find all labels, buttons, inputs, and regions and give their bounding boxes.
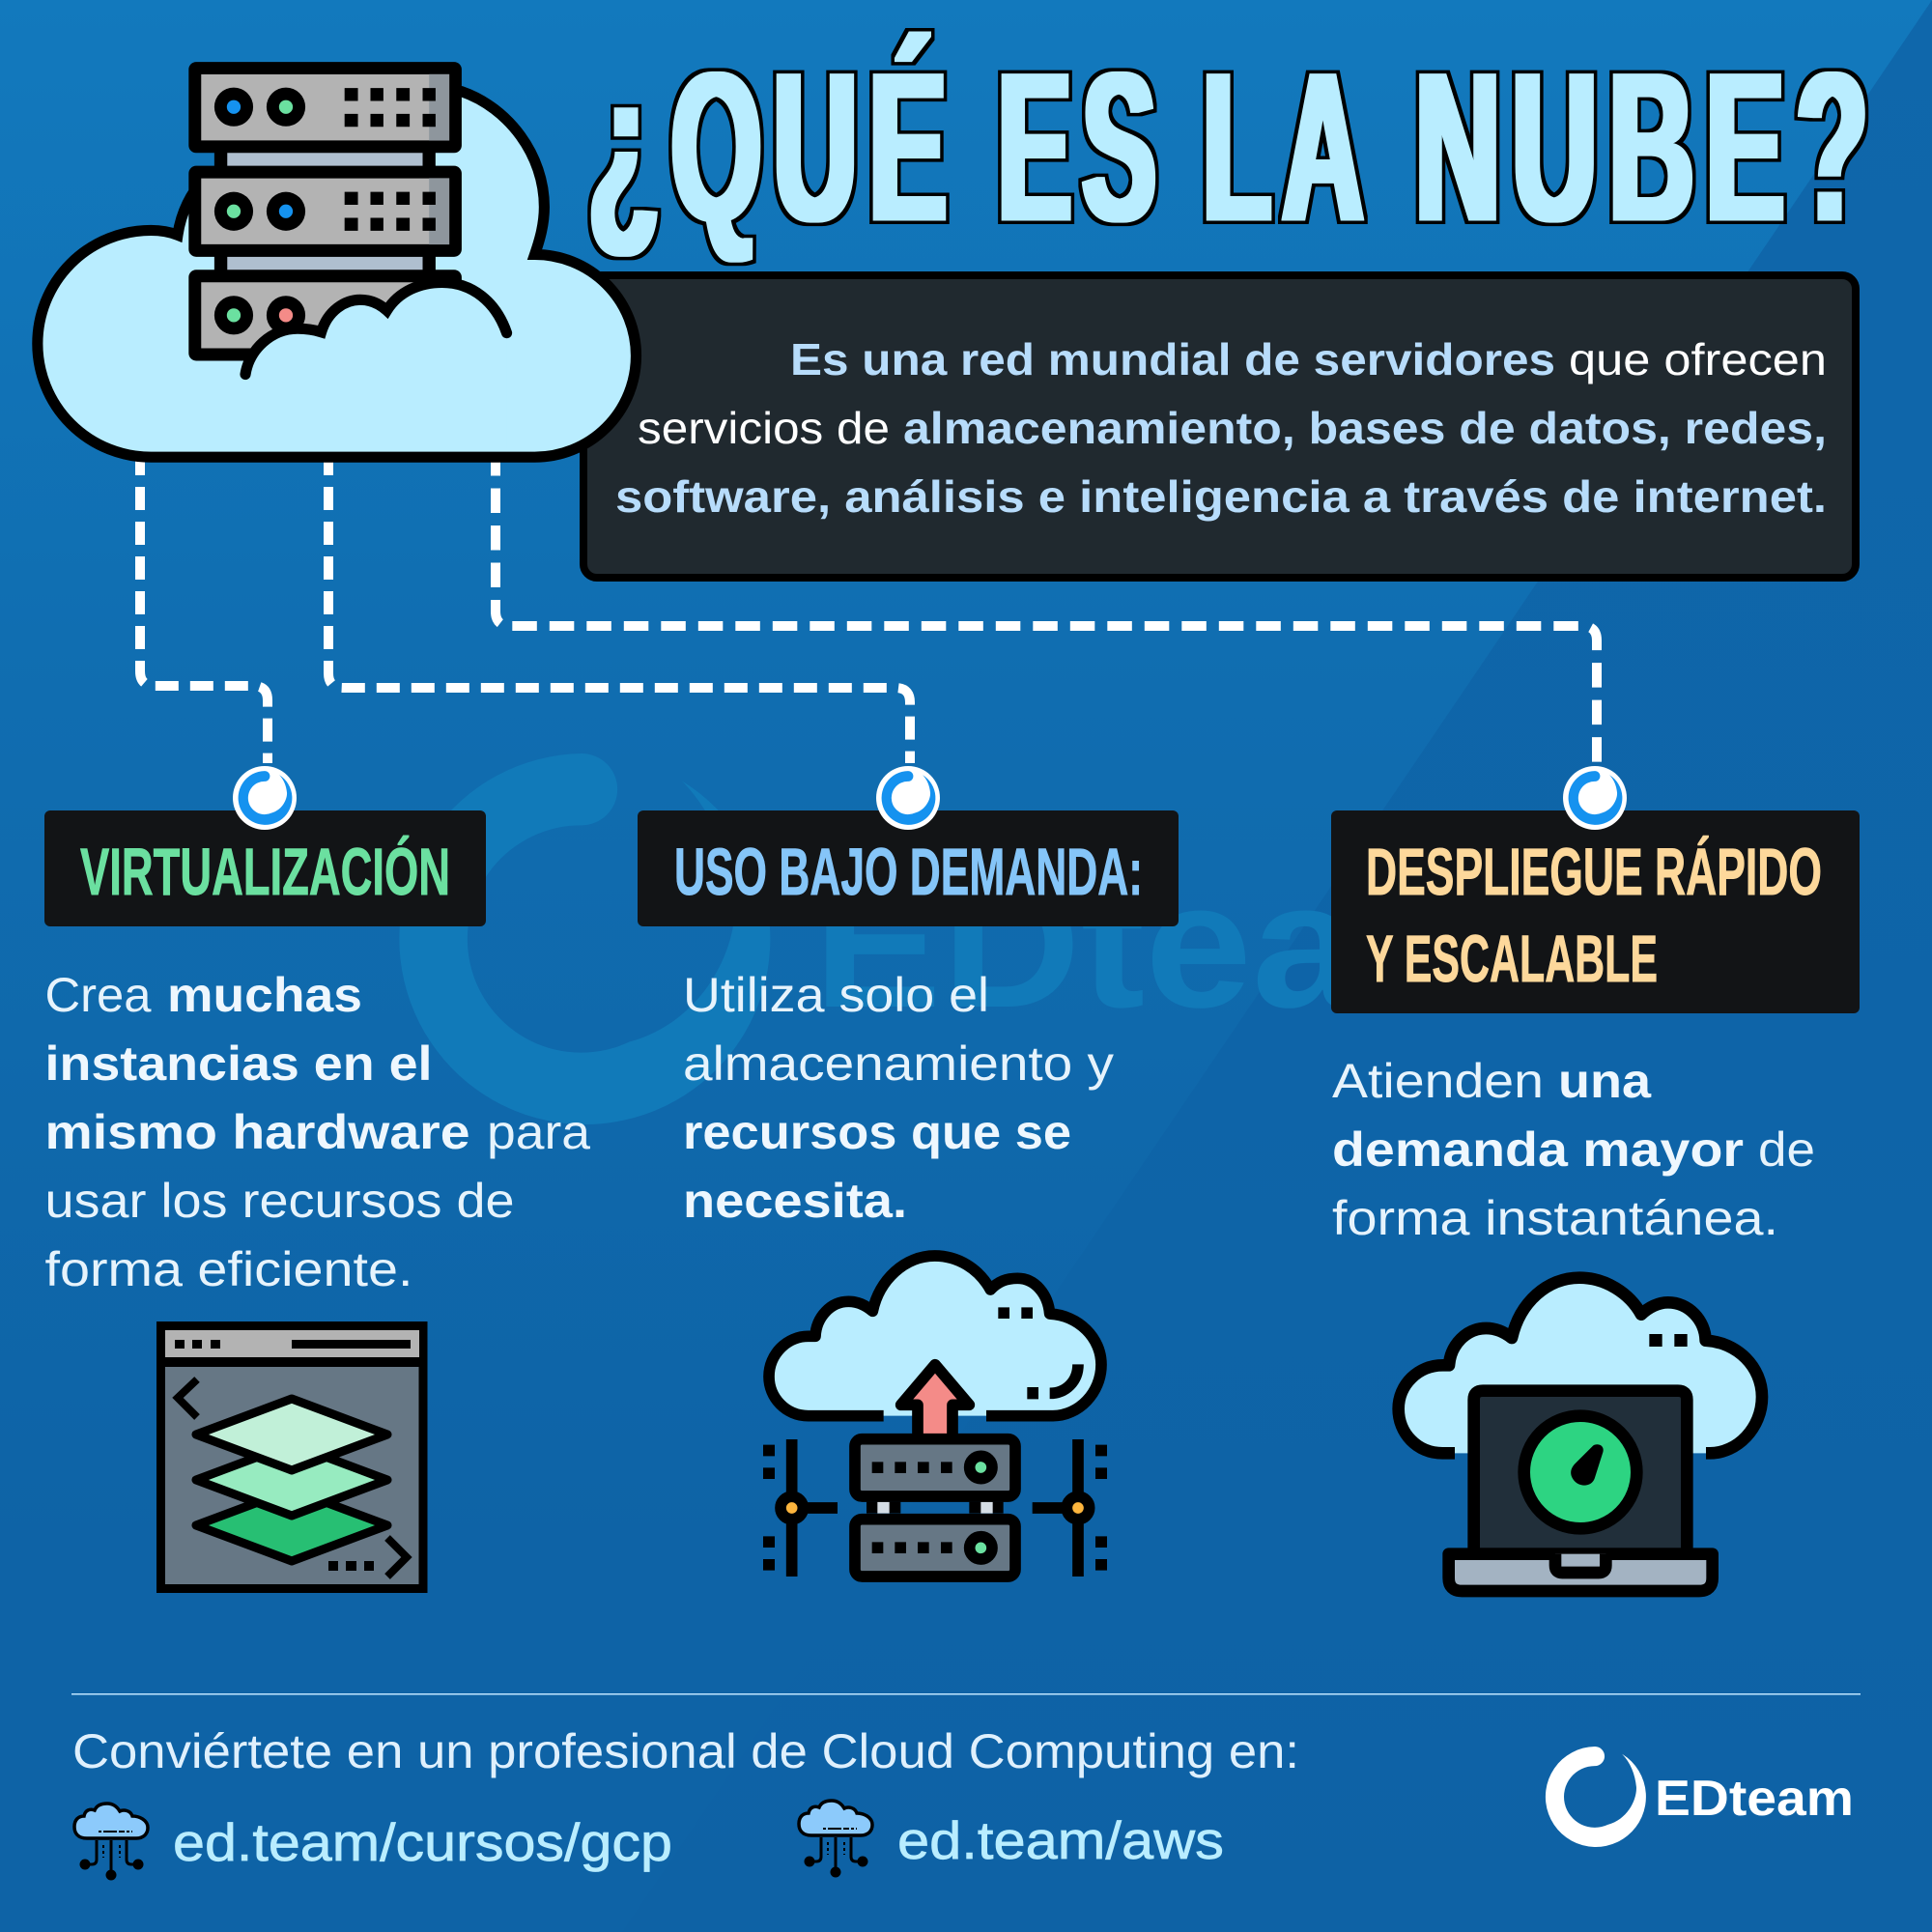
text: virtualización: [44, 968, 590, 1296]
divider: [71, 1693, 1861, 1694]
link: aws: ed.team/aws: [897, 1810, 1224, 1870]
watermark logo: EDteam: [813, 846, 1530, 1045]
text: despliegue: una: [1558, 1054, 1652, 1108]
text: virtualización: mismo hardware: [44, 1105, 469, 1159]
icon: cloud with servers: [38, 69, 636, 457]
icon: small cloud: [74, 1804, 148, 1880]
panel: despliegue heading: [1331, 766, 1860, 1013]
text: uso bajo demanda: necesita.: [683, 1174, 907, 1228]
text: uso bajo demanda: almacenamiento y: [683, 1037, 1114, 1091]
badge: [233, 766, 297, 830]
watermark logo: [399, 753, 1530, 1124]
icon: laptop speed cloud: [1399, 1278, 1762, 1591]
icon: cloud upload servers: [763, 1256, 1107, 1577]
logo: EDteam: [1546, 1747, 1854, 1847]
panel: definition: [583, 275, 1856, 578]
title: [588, 28, 1880, 266]
panel: virtualización heading: VIRTUALIZACIÓN: [80, 835, 450, 909]
text: despliegue: Atienden: [1332, 1054, 1544, 1108]
text: virtualización: para: [487, 1105, 590, 1159]
text: virtualización: Crea: [44, 968, 152, 1022]
front cloud: [245, 282, 507, 448]
footer call to action: Conviértete en un profesional de Cloud Computing en:: [72, 1724, 1299, 1778]
icon: small cloud: [799, 1801, 872, 1878]
text: virtualización: muchas: [167, 968, 362, 1022]
panel: virtualización heading: [44, 766, 486, 926]
icon: layers window: [160, 1325, 423, 1588]
link: gcp: [74, 1804, 672, 1880]
panel: definition: Es una red mundial de servidores: [790, 334, 1555, 384]
text: virtualización: instancias en el: [44, 1037, 433, 1091]
text: uso bajo demanda: [683, 968, 1114, 1228]
panel: uso bajo demanda heading: [638, 766, 1179, 926]
text: despliegue: forma instantánea.: [1332, 1191, 1778, 1245]
title: ES: [998, 28, 1167, 266]
title: ¿QUÉ: [588, 28, 958, 266]
panel: definition: almacenamiento, bases de datos, redes,: [903, 403, 1827, 453]
panel: definition: que ofrecen: [1569, 334, 1827, 384]
link: aws: [799, 1801, 1224, 1878]
panel: despliegue heading: Y ESCALABLE: [1366, 922, 1658, 996]
text: uso bajo demanda: Utiliza solo el: [683, 968, 989, 1022]
panel: definition: servicios de: [638, 403, 890, 453]
server rack: [195, 69, 455, 355]
panel: uso bajo demanda heading: USO BAJO DEMANDA:: [674, 835, 1143, 909]
logo: EDteam: EDteam: [1655, 1771, 1854, 1827]
dashed connectors: [140, 451, 1597, 763]
title: LA: [1203, 28, 1375, 266]
badge: [1563, 766, 1627, 830]
text: virtualización: forma eficiente.: [44, 1242, 413, 1296]
text: uso bajo demanda: recursos que se: [683, 1105, 1071, 1159]
text: virtualización: usar los recursos de: [44, 1174, 514, 1228]
link: gcp: ed.team/cursos/gcp: [173, 1812, 672, 1872]
panel: definition: software, análisis e inteligencia a través de internet.: [615, 471, 1827, 522]
badge: [876, 766, 940, 830]
text: despliegue: [1332, 1054, 1815, 1245]
text: despliegue: demanda mayor: [1332, 1122, 1744, 1177]
text: despliegue: de: [1758, 1122, 1815, 1177]
